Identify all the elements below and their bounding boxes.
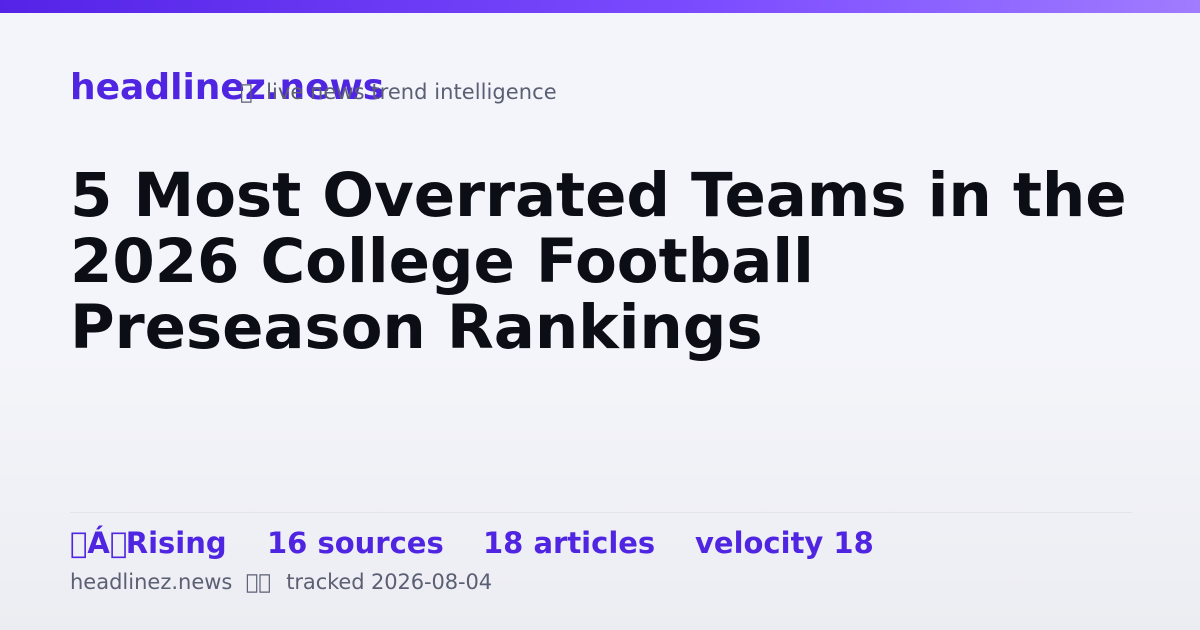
title: 5 Most Overrated Teams in the 2026 College Football Preseason Rankings <box>70 160 1127 363</box>
stat: articles: 18 articles <box>483 526 655 560</box>
brand name: headlinez.news <box>70 66 384 108</box>
stats row <box>70 526 874 560</box>
footer line: headlinez.news  tracked 2026-08-04 <box>70 570 492 594</box>
stat: sources: 16 sources <box>267 526 444 560</box>
top gradient bar <box>0 0 1200 13</box>
divider <box>70 512 1132 513</box>
tagline:  live news trend intelligence <box>240 80 557 104</box>
stat: velocity: velocity 18 <box>695 526 874 560</box>
stat: status rising: ÁRising <box>70 526 227 560</box>
